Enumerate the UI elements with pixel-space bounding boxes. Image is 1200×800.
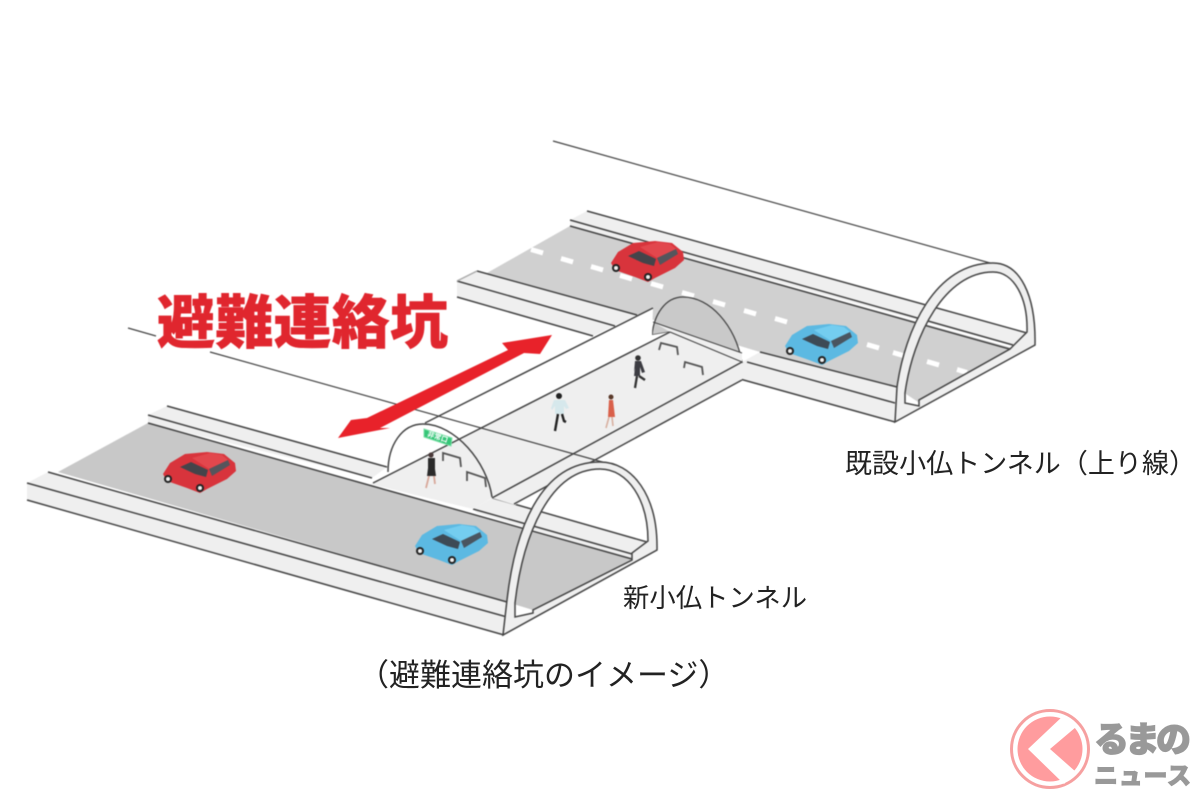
heading: evacuation passage: 避難連絡坑 <box>157 291 448 356</box>
evacuation passage <box>370 297 742 509</box>
ridge line of existing tunnel <box>553 141 990 263</box>
arrow: double-headed red <box>338 335 552 438</box>
barriers <box>443 343 703 487</box>
far end opening <box>652 297 742 362</box>
green exit sign <box>424 429 452 446</box>
label: existing tunnel: 既設小仏トンネル（上り線） <box>845 449 1196 479</box>
diagram artwork <box>27 141 1035 635</box>
people <box>426 355 645 488</box>
existing tunnel (upper road) <box>457 141 1035 422</box>
existing tunnel portal <box>895 263 1035 422</box>
logo sub wordmark: ニュース <box>1094 763 1191 790</box>
new tunnel (lower road) <box>27 406 647 635</box>
person: walker in dark clothes <box>634 355 645 388</box>
near passage arch <box>388 424 492 497</box>
passage roof strip <box>400 308 670 440</box>
green exit sign: 非常口 <box>426 429 449 444</box>
road lane dashes <box>531 250 967 372</box>
car: red lower <box>163 452 236 493</box>
person: woman near arch <box>426 452 436 488</box>
car: red upper <box>611 241 684 282</box>
car: blue lower <box>415 524 488 565</box>
logo icon <box>1012 710 1088 788</box>
logo wordmark: るまの <box>1094 721 1191 760</box>
logo: kuruma no news watermark <box>1012 710 1191 790</box>
passage floor <box>370 332 742 509</box>
new tunnel portal <box>503 462 657 635</box>
ridge line of new tunnel <box>128 328 606 463</box>
car: blue upper <box>785 324 858 365</box>
caption: image of evacuation passage: （避難連絡坑のイメージ） <box>358 658 729 693</box>
label: new tunnel: 新小仏トンネル <box>623 583 807 613</box>
person: woman in red dress <box>606 394 615 428</box>
person: man in white shirt <box>551 393 569 431</box>
